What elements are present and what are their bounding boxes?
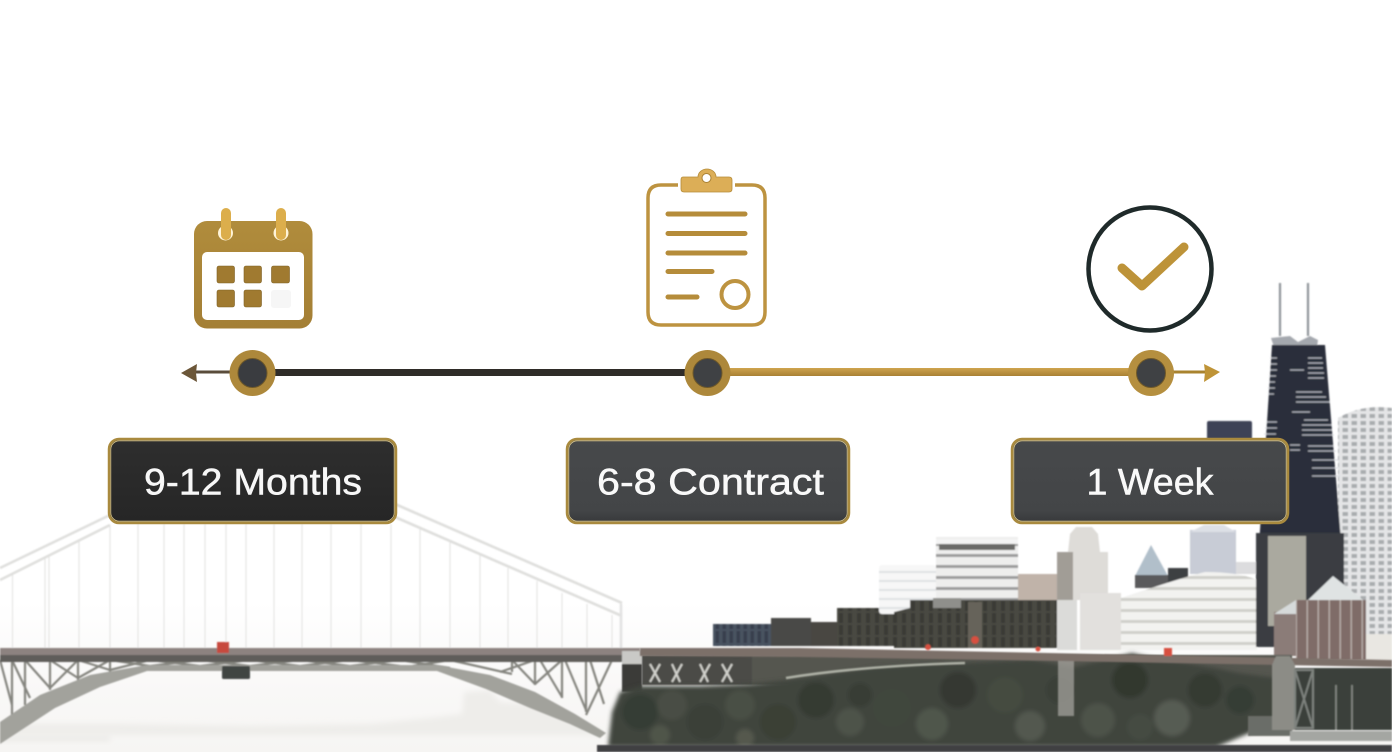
node: first [230,350,276,396]
icon: clipboard [648,169,765,325]
pale building [879,565,936,614]
timeline [181,350,1220,396]
bridge truss [0,655,612,715]
Hancock roof [1271,336,1318,347]
white tower right [1338,407,1392,640]
photo: trees and right-hand bridge [597,636,1392,752]
node: second [684,350,730,396]
bridge upper arch [0,504,622,650]
curved pale rail [786,663,965,678]
icon: calendar [194,208,312,328]
blue spire [1135,545,1168,588]
red vehicle [217,642,229,653]
concrete pier mid [1058,661,1074,716]
right dark bank [1291,668,1392,730]
icon: checkmark circle [1088,208,1212,330]
shoreline [597,745,1392,752]
tree mass [608,653,1292,747]
white banded building [936,537,1018,605]
signal lights [925,636,1172,656]
label: 6-8 Contract [567,439,849,523]
bridge pier [622,651,642,664]
arrow: left [181,364,232,382]
Hancock tower [1256,345,1344,600]
line: gold segment [725,368,1133,376]
photo: distant haze shoreline [0,690,600,740]
lamp post [1336,685,1352,730]
low dark buildings [713,624,771,646]
Hancock antennas [1280,283,1308,336]
tree foliage [622,694,658,730]
dark mid-rise [1256,533,1344,647]
label: 6-8 Contract: 6-8 Contract [597,462,825,502]
label: 1 Week [1012,439,1288,523]
label: 1 Week: 1 Week [1086,462,1214,502]
Hancock window streaks [1264,358,1340,476]
pink building [1018,574,1058,606]
photo: skyline [713,283,1392,660]
rear truss [642,655,1292,685]
line: dark segment [270,369,690,376]
concrete pier right [1272,656,1295,730]
big white building [1121,572,1257,650]
arrow: right [1170,364,1220,382]
far right road [1290,731,1392,741]
concrete column [1057,600,1077,650]
pale tower [1190,530,1236,574]
photo: bridge [0,504,642,744]
low white block [1366,634,1392,660]
sign under deck [222,666,250,679]
small dark block [1207,421,1252,441]
bridge hangers [12,524,612,650]
central dark building [894,600,1057,648]
label: 9-12 Months: 9-12 Months [144,462,362,502]
stone tower [1057,527,1108,600]
label: 9-12 Months [109,439,396,523]
bridge deck left [0,648,640,655]
node: third [1128,350,1174,396]
pyramid building [1296,600,1366,660]
bridge lower arch [0,665,606,744]
deck right [640,648,1392,667]
